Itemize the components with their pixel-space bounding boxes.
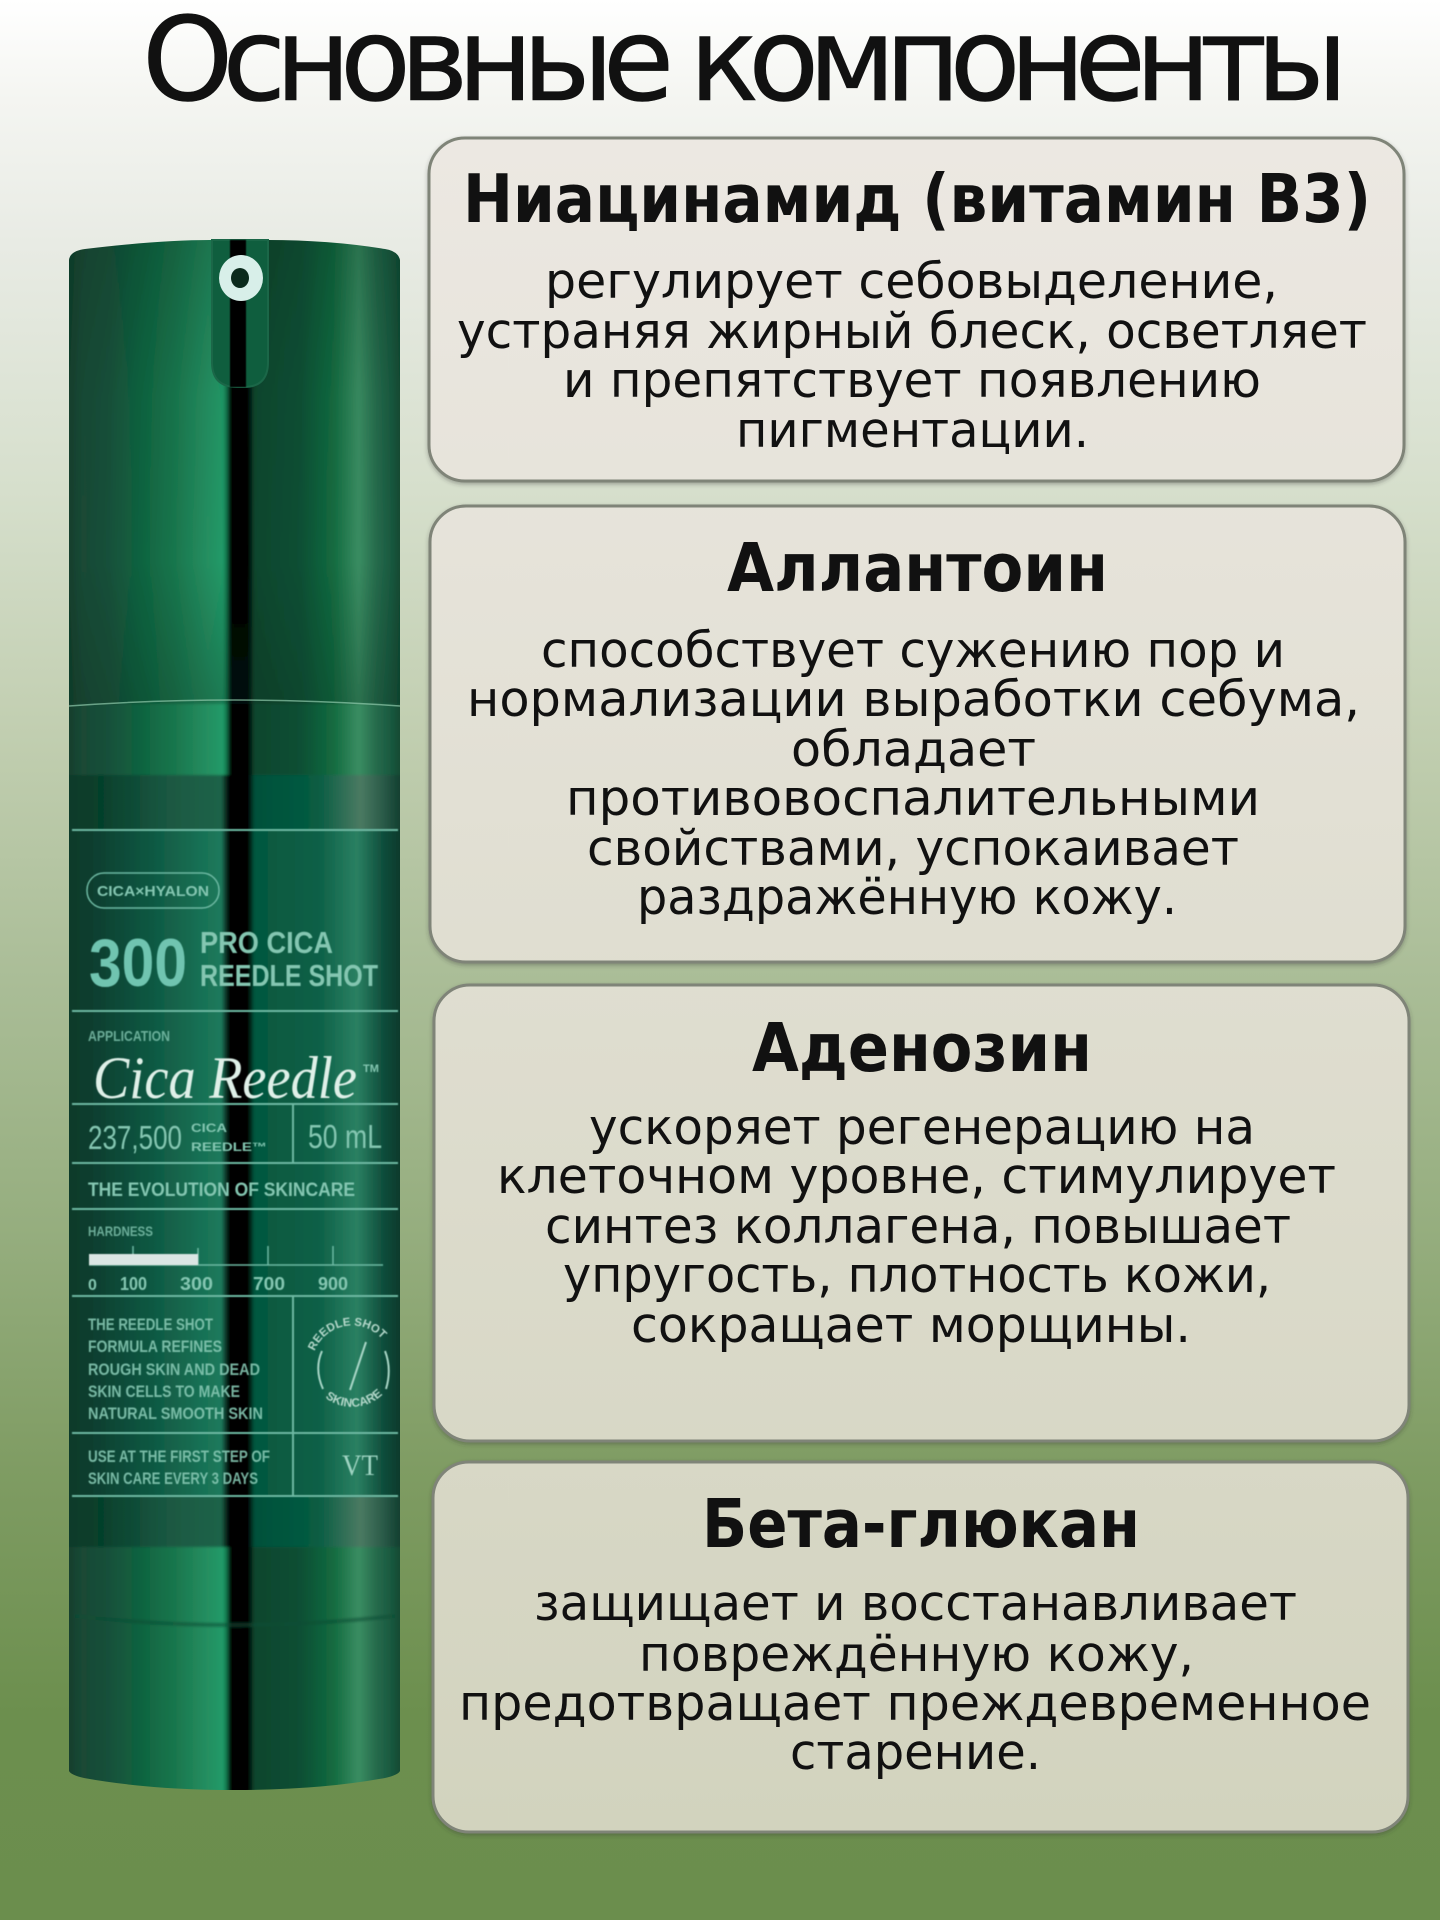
hardness scale: HARDNESS xyxy=(88,1223,153,1239)
formula description: ROUGH SKIN AND DEAD xyxy=(88,1360,260,1379)
badge: cica x hyalon xyxy=(87,873,219,908)
hardness scale: 0 xyxy=(88,1277,97,1294)
body: niacinamide: устраняя жирный блеск, осветляет xyxy=(457,303,1367,360)
hardness scale: 100 xyxy=(120,1274,147,1294)
body: adenosine: синтез коллагена, повышает xyxy=(545,1198,1291,1255)
body: niacinamide xyxy=(457,253,1367,459)
script name: Cica Reedle xyxy=(93,1045,357,1111)
body: niacinamide: регулирует себовыделение, xyxy=(545,253,1278,310)
product name: REEDLE SHOT xyxy=(200,958,378,993)
bottle collar xyxy=(55,704,415,775)
needle count: 237,500 xyxy=(88,1119,182,1156)
seal emblem: REEDLE SHOT xyxy=(307,1316,388,1351)
VT logo: VT xyxy=(342,1449,378,1482)
panel: adenosine xyxy=(434,985,1409,1441)
seal emblem xyxy=(307,1316,390,1408)
hardness scale xyxy=(88,1223,383,1294)
body: allantoin: раздражённую кожу. xyxy=(637,869,1177,926)
hardness scale: 700 xyxy=(253,1274,285,1294)
usage note: USE AT THE FIRST STEP OF xyxy=(88,1447,270,1466)
needle count: REEDLE™ xyxy=(191,1140,267,1154)
formula description: FORMULA REFINES xyxy=(88,1337,222,1356)
product name xyxy=(200,925,378,993)
body: niacinamide: пигментации. xyxy=(736,402,1089,459)
base seam xyxy=(75,1616,395,1625)
body: allantoin: противовоспалительными xyxy=(566,770,1260,827)
hardness scale: 900 xyxy=(318,1274,348,1294)
nozzle ring xyxy=(219,255,263,301)
nozzle centre shine xyxy=(230,240,246,387)
pump nozzle slot xyxy=(212,240,268,387)
heading: allantoin: Аллантоин xyxy=(727,529,1108,607)
body: allantoin: способствует сужению пор и xyxy=(541,622,1285,679)
product bottle xyxy=(69,239,400,1790)
body: niacinamide: и препятствует появлению xyxy=(563,352,1261,409)
cap seam highlight xyxy=(69,700,400,706)
dark lower band xyxy=(55,1496,415,1547)
heading: beta-glucan: Бета-глюкан xyxy=(702,1485,1140,1563)
application label: APPLICATION xyxy=(88,1028,170,1045)
dark upper band xyxy=(55,775,415,830)
label printing xyxy=(71,828,399,1498)
formula description: THE REEDLE SHOT xyxy=(88,1315,213,1334)
cap shading xyxy=(55,230,415,704)
heading: adenosine: Аденозин xyxy=(752,1009,1092,1087)
formula description: NATURAL SMOOTH SKIN xyxy=(88,1404,263,1423)
panel: allantoin xyxy=(430,506,1405,962)
panel: niacinamide xyxy=(429,138,1404,481)
body: adenosine: ускоряет регенерацию на xyxy=(589,1099,1255,1156)
body: adenosine: клеточном уровне, стимулирует xyxy=(497,1148,1336,1205)
body: allantoin: свойствами, успокаивает xyxy=(587,820,1239,877)
body: beta-glucan: повреждённую кожу, xyxy=(639,1626,1194,1683)
product name: PRO CICA xyxy=(200,925,333,960)
seal emblem: SKINCARE xyxy=(326,1388,383,1408)
badge: cica x hyalon: CICA×HYALON xyxy=(97,883,209,900)
body: allantoin: нормализации выработки себума, xyxy=(467,671,1360,728)
label grid lines xyxy=(72,830,398,1496)
body: beta-glucan xyxy=(459,1575,1371,1781)
formula description: SKIN CELLS TO MAKE xyxy=(88,1382,240,1401)
label background xyxy=(55,830,415,1496)
hardness scale: 300 xyxy=(180,1274,213,1294)
script name: TM xyxy=(363,1063,379,1075)
usage note xyxy=(88,1447,270,1488)
formula description xyxy=(88,1315,263,1423)
body: adenosine xyxy=(497,1099,1336,1354)
panel: beta-glucan xyxy=(433,1462,1408,1832)
body: beta-glucan: защищает и восстанавливает xyxy=(534,1575,1297,1632)
bottle base xyxy=(55,1547,415,1797)
body: allantoin xyxy=(467,622,1360,926)
usage note: SKIN CARE EVERY 3 DAYS xyxy=(88,1469,258,1488)
body: beta-glucan: предотвращает преждевременное xyxy=(459,1675,1371,1732)
body: adenosine: сокращает морщины. xyxy=(631,1297,1191,1354)
body: beta-glucan: старение. xyxy=(790,1724,1041,1781)
tagline: THE EVOLUTION OF SKINCARE xyxy=(88,1180,355,1201)
product number 300: 300 xyxy=(89,925,187,1001)
needle count: CICA xyxy=(191,1121,227,1135)
volume: 50 mL xyxy=(308,1118,382,1155)
body: allantoin: обладает xyxy=(791,721,1036,778)
needle count xyxy=(88,1119,267,1156)
body: adenosine: упругость, плотность кожи, xyxy=(563,1247,1271,1304)
bottle cap xyxy=(55,230,415,704)
